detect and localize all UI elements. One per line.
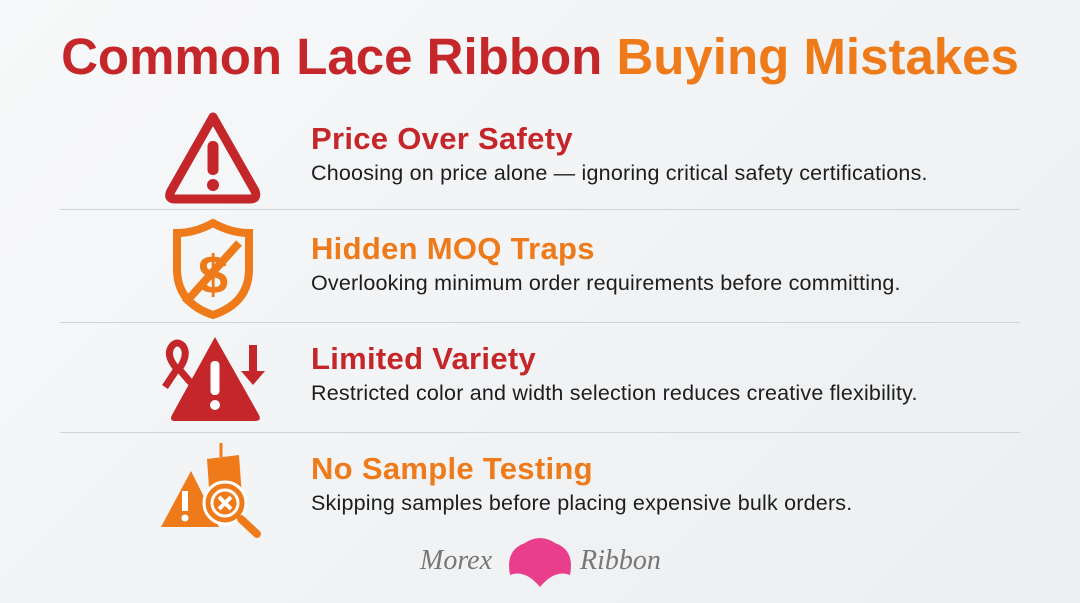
description: Overlooking minimum order requirements before committing.	[311, 271, 901, 295]
logo	[420, 538, 661, 587]
icon: ribbon warning arrow	[162, 337, 265, 421]
row: no sample testing	[161, 443, 852, 538]
description: Skipping samples before placing expensive bulk orders.	[311, 491, 852, 515]
icon: warning triangle	[165, 112, 260, 204]
logo: Ribbon	[580, 545, 661, 576]
icon: shield dollar	[173, 219, 253, 320]
description: Choosing on price alone — ignoring critical safety certifications.	[311, 161, 928, 185]
heading: Limited Variety	[311, 341, 536, 376]
row: hidden MOQ traps	[173, 219, 901, 320]
title: Common Lace Ribbon Buying Mistakes	[61, 28, 1019, 85]
description: Restricted color and width selection reduces creative flexibility.	[311, 381, 918, 405]
row: limited variety	[162, 337, 918, 421]
logo: Morex	[420, 545, 492, 576]
heading: Price Over Safety	[311, 121, 573, 156]
icon: tag magnifier	[161, 443, 261, 538]
icon: shield dollar: $	[198, 245, 228, 305]
icon: pink bow	[509, 538, 571, 587]
heading: Hidden MOQ Traps	[311, 231, 595, 266]
row: price over safety	[165, 112, 928, 204]
heading: No Sample Testing	[311, 451, 593, 486]
